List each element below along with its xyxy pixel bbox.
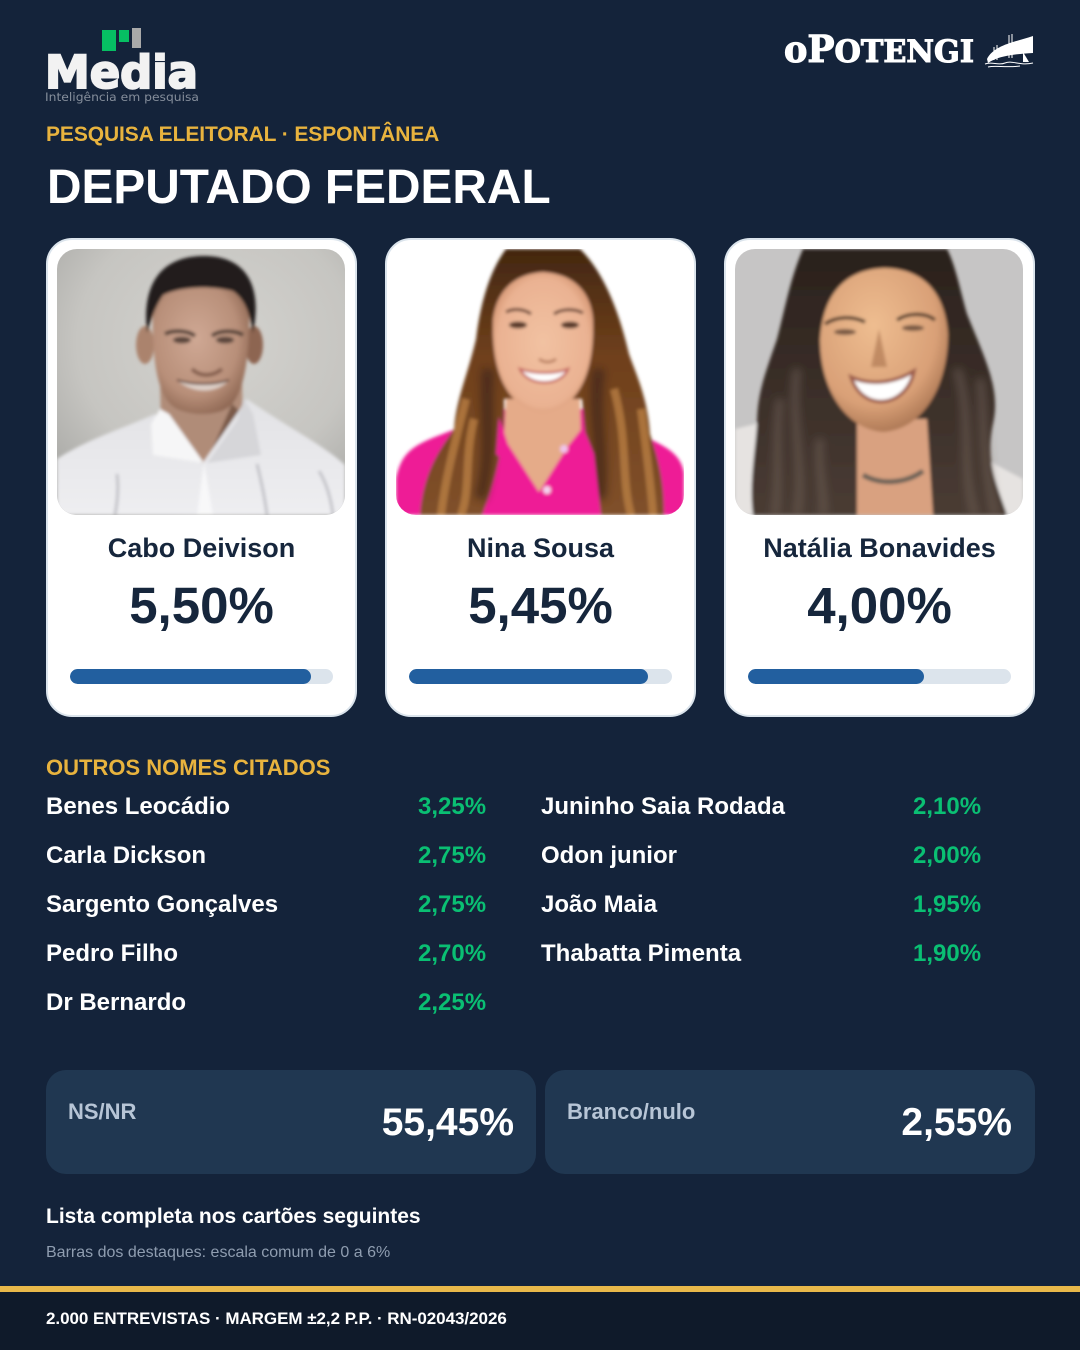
stat box: NS/NR <box>46 1070 536 1174</box>
row: Benes Leocádio <box>46 793 230 820</box>
footer <box>0 1286 1080 1350</box>
bar <box>409 669 672 684</box>
percentage: 5,45% <box>468 577 613 634</box>
row <box>541 891 981 918</box>
row: 2,75% <box>418 891 486 918</box>
row <box>46 793 486 820</box>
row <box>541 793 981 820</box>
stat box: NS/NR: 55,45% <box>382 1101 514 1144</box>
row <box>541 940 981 967</box>
panel: Cabo Deivison <box>46 238 357 717</box>
list: right column <box>541 793 981 967</box>
row: Odon junior <box>541 842 677 869</box>
row: Carla Dickson <box>46 842 206 869</box>
row <box>46 891 486 918</box>
kicker: PESQUISA ELEITORAL · ESPONTÂNEA <box>46 123 439 146</box>
row: João Maia <box>541 891 657 918</box>
panel: Nina Sousa <box>385 238 696 717</box>
bar <box>748 669 1011 684</box>
title: DEPUTADO FEDERAL <box>47 161 551 214</box>
percentage: 4,00% <box>807 577 952 634</box>
row: Pedro Filho <box>46 940 178 967</box>
name: Nina Sousa <box>467 533 614 563</box>
photo: Nina Sousa <box>396 249 684 515</box>
row: Juninho Saia Rodada <box>541 793 785 820</box>
row <box>46 940 486 967</box>
row: Dr Bernardo <box>46 989 186 1016</box>
row: 2,00% <box>913 842 981 869</box>
row: 2,25% <box>418 989 486 1016</box>
list: left column <box>46 793 486 1016</box>
note heading: Lista completa nos cartões seguintes <box>46 1205 421 1228</box>
row <box>541 842 981 869</box>
row <box>46 842 486 869</box>
row: 3,25% <box>418 793 486 820</box>
row <box>46 989 486 1016</box>
bar <box>70 669 333 684</box>
photo: Natália Bonavides <box>735 249 1023 515</box>
stat box: Branco/nulo: Branco/nulo <box>567 1099 695 1124</box>
stat box: Branco/nulo: 2,55% <box>901 1101 1012 1144</box>
row: 2,75% <box>418 842 486 869</box>
row: Thabatta Pimenta <box>541 940 741 967</box>
name: Cabo Deivison <box>108 533 295 563</box>
row: 1,95% <box>913 891 981 918</box>
percentage: 5,50% <box>129 577 274 634</box>
note: Barras dos destaques: escala comum de 0 a 6% <box>46 1244 390 1261</box>
footer text: 2.000 ENTREVISTAS · MARGEM ±2,2 P.P. · RN-02043/2026 <box>46 1309 507 1328</box>
logo: Media: Media <box>45 46 198 99</box>
photo: Cabo Deivison <box>57 249 345 515</box>
row: 2,10% <box>913 793 981 820</box>
logo: Media <box>45 28 199 104</box>
row: 1,90% <box>913 940 981 967</box>
row: 2,70% <box>418 940 486 967</box>
row: Sargento Gonçalves <box>46 891 278 918</box>
stat box: Branco/nulo <box>545 1070 1035 1174</box>
name: Natália Bonavides <box>763 533 996 563</box>
logo: Media: Inteligência em pesquisa <box>45 90 199 104</box>
stat box: NS/NR: NS/NR <box>68 1099 136 1124</box>
section heading: OUTROS NOMES CITADOS <box>46 755 330 780</box>
panel: Natália Bonavides <box>724 238 1035 717</box>
